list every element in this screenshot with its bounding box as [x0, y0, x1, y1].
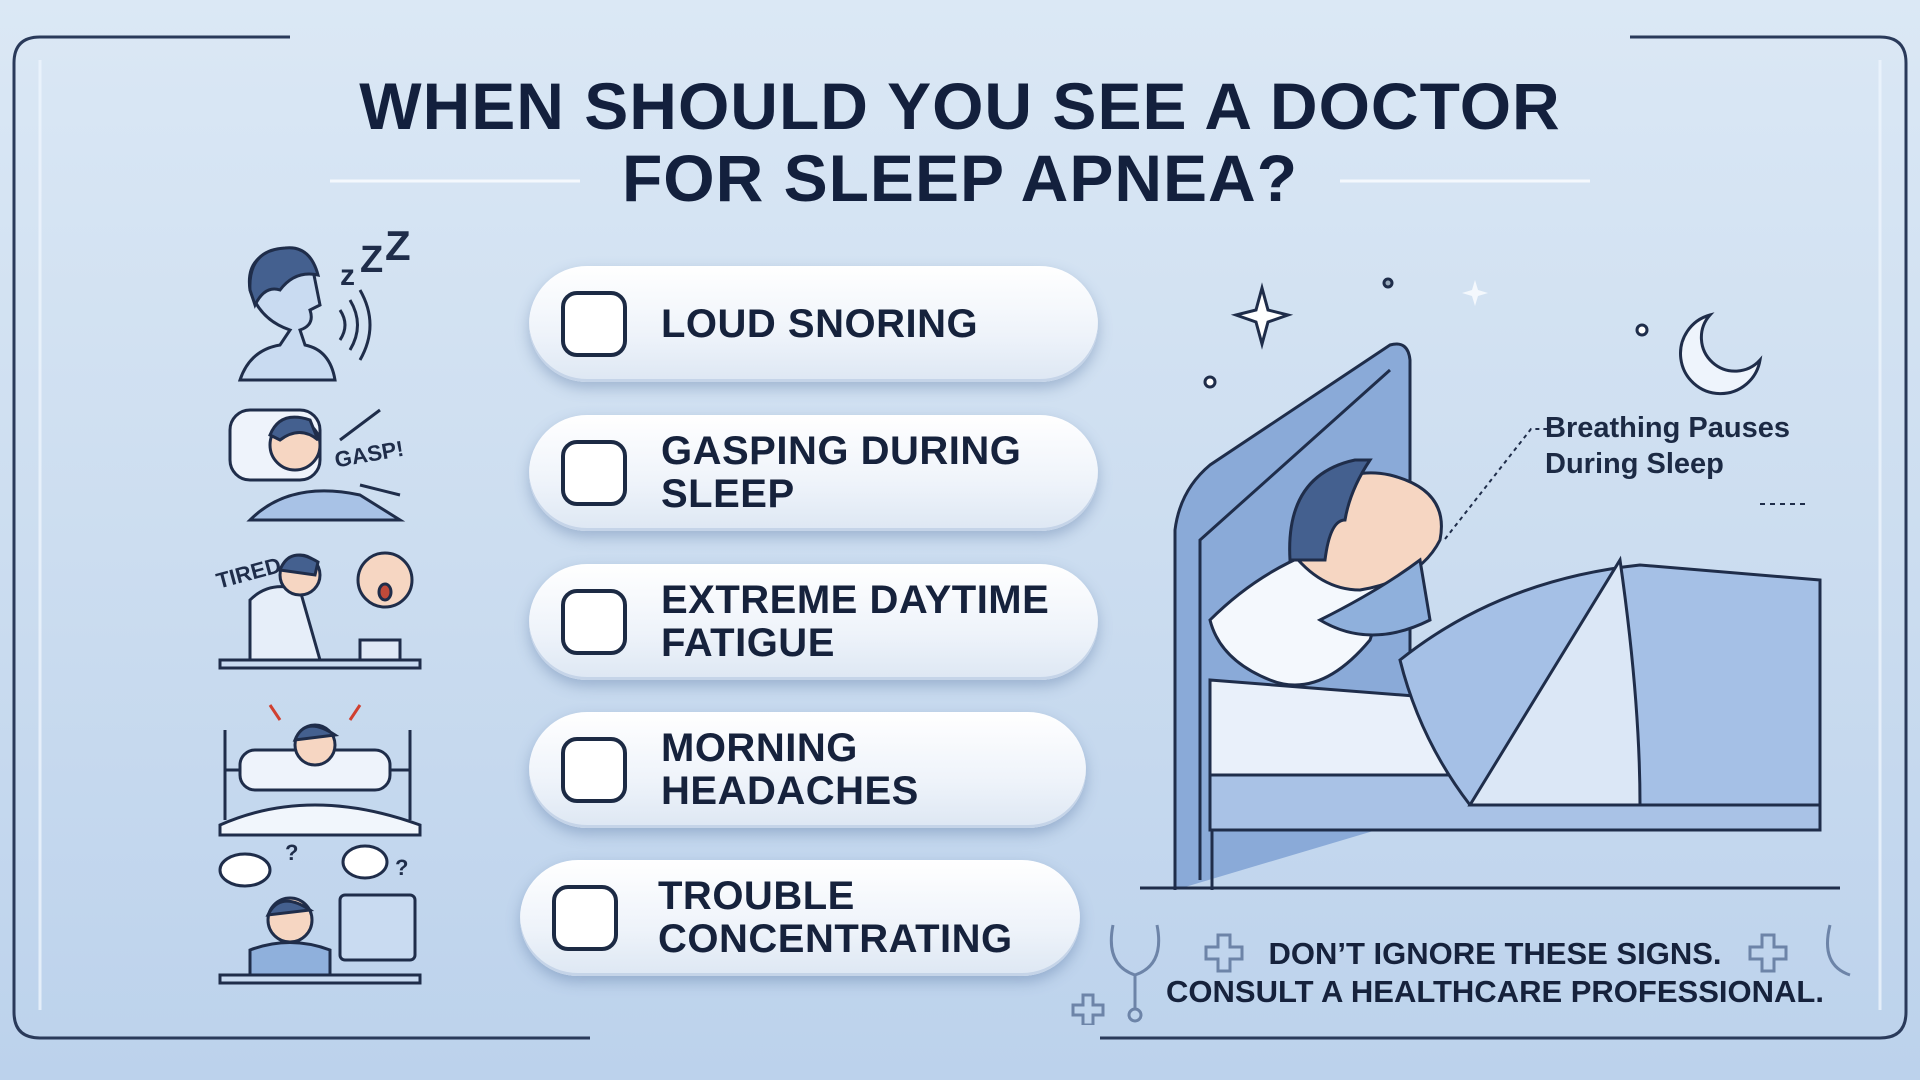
callout: breathing pauses	[1545, 412, 1790, 480]
item: loud snoring	[529, 266, 1098, 382]
item: concentration: CONCENTRATING	[658, 917, 1013, 961]
item: headaches	[529, 712, 1086, 828]
item: concentration	[520, 860, 1080, 976]
item: gasping: SLEEP	[661, 472, 795, 516]
icon column	[214, 230, 422, 984]
bottom message	[1166, 936, 1824, 1009]
icon: stethoscopes and crosses	[1072, 924, 1850, 1025]
bottom message: CONSULT A HEALTHCARE PROFESSIONAL.	[1166, 974, 1824, 1009]
head	[1290, 473, 1441, 590]
headboard	[1175, 344, 1410, 890]
blanket	[1400, 565, 1820, 805]
icon: concentrating	[220, 840, 420, 983]
item: fatigue	[529, 564, 1098, 680]
icon: concentrating: ?	[285, 840, 298, 865]
checklist	[514, 265, 1104, 988]
title	[359, 69, 1561, 215]
icon: headache	[220, 705, 420, 835]
icon: snoring man: Z	[360, 239, 383, 281]
callout: breathing pauses: During Sleep	[1545, 448, 1724, 480]
title: FOR SLEEP APNEA?	[622, 141, 1298, 215]
icon: concentrating: ?	[395, 855, 408, 880]
item: loud snoring: LOUD SNORING	[661, 302, 978, 346]
callout: breathing pauses: Breathing Pauses	[1545, 412, 1790, 444]
icon: snoring man	[240, 222, 411, 380]
illustration: man sleeping in bed	[1140, 278, 1840, 890]
pillow	[1210, 540, 1381, 685]
item: headaches: MORNING	[661, 726, 858, 770]
item: fatigue: FATIGUE	[661, 621, 835, 665]
item: headaches: HEADACHES	[661, 769, 919, 813]
icon: tired	[214, 552, 420, 668]
mattress	[1210, 680, 1720, 820]
item: concentration: TROUBLE	[658, 874, 855, 918]
title: WHEN SHOULD YOU SEE A DOCTOR	[359, 69, 1561, 143]
item: gasping	[529, 415, 1098, 531]
icon: tired: TIRED	[214, 552, 284, 594]
item: gasping: GASPING DURING	[661, 429, 1021, 473]
icon: gasping: GASP!	[333, 436, 406, 472]
icon: snoring man: z	[340, 259, 355, 292]
icon: gasping	[230, 410, 406, 520]
bottom message: DON’T IGNORE THESE SIGNS.	[1268, 936, 1722, 971]
stars and moon	[1205, 279, 1760, 394]
item: fatigue: EXTREME DAYTIME	[661, 578, 1049, 622]
